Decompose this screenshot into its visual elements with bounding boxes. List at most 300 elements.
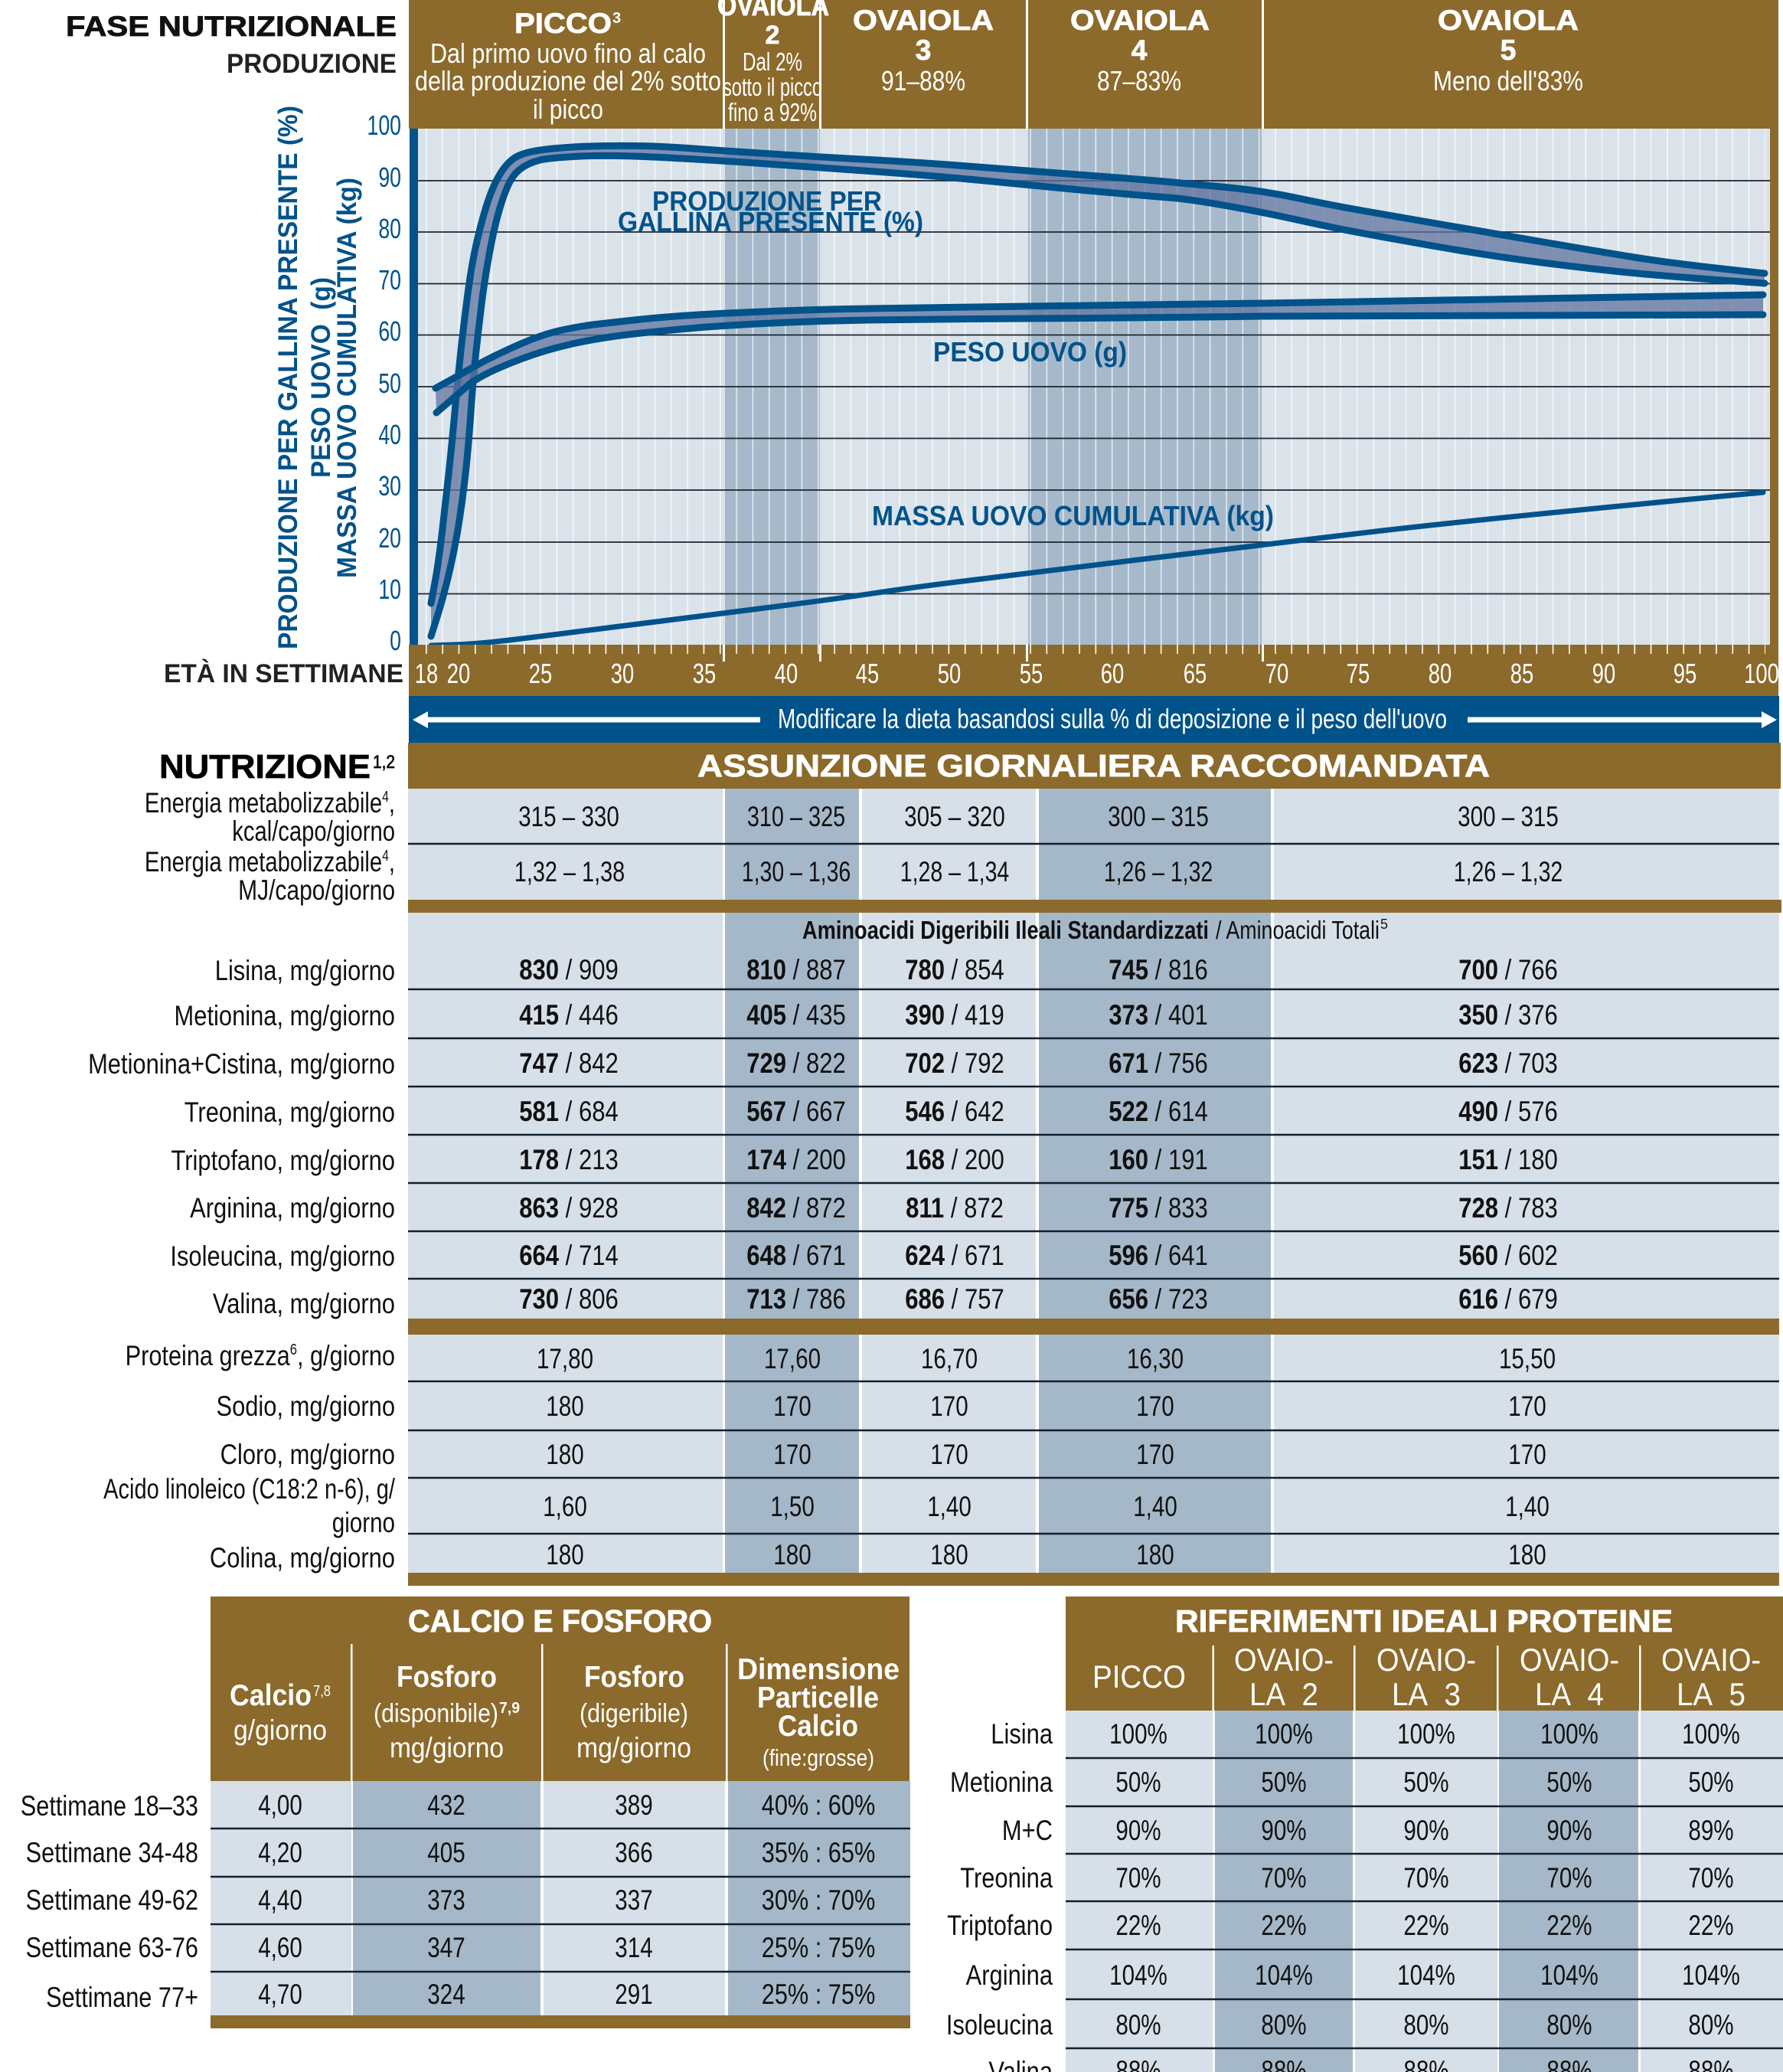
- phase: ovaiola 5: [1433, 5, 1583, 96]
- row: settimane 77+: 291: [615, 1979, 653, 2011]
- y-axis tick labels: 0: [390, 625, 401, 656]
- row: treonina: 70%: [1546, 1863, 1592, 1894]
- row: lisina: 100%: [1397, 1719, 1455, 1750]
- row: isoleucina: Isoleucina, mg/giorno: [170, 1240, 395, 1273]
- y-axis tick labels: 70: [378, 264, 401, 296]
- heading: nutrizione: NUTRIZIONE: [159, 748, 371, 786]
- panel: phase header band: [409, 0, 1778, 129]
- row: acido linoleico: [103, 1474, 1550, 1539]
- row: proteina grezza: [126, 1340, 1556, 1375]
- curve: peso uovo: [436, 295, 1763, 413]
- row: sodio: 180: [546, 1391, 584, 1423]
- row: treonina: 70%: [1261, 1863, 1307, 1894]
- row: settimane 49-62: [26, 1884, 875, 1917]
- row: metionina: 50%: [1688, 1767, 1734, 1799]
- arrow: right: [1468, 711, 1777, 728]
- column header: picco: PICCO: [1092, 1659, 1186, 1695]
- row: sodio: [216, 1391, 1546, 1423]
- row: energia MJ: 1,26 – 1,32: [1454, 855, 1563, 887]
- row: triptofano: 22%: [1688, 1910, 1734, 1942]
- row: energia MJ: 1,28 – 1,34: [900, 855, 1009, 887]
- row: proteina grezza: Proteina grezza: [126, 1340, 290, 1372]
- row: settimane 49-62: 337: [615, 1885, 653, 1917]
- row: settimane 18-33: 4,00: [258, 1790, 302, 1822]
- x-axis band with week ticks: 100: [1744, 658, 1779, 689]
- heading: riferimenti ideali proteine: RIFERIMENTI IDEALI PROTEINE: [1175, 1603, 1673, 1639]
- x-axis band with week ticks: 85: [1510, 658, 1533, 689]
- row: settimane 77+: 25% : 75%: [762, 1979, 875, 2011]
- phase: picco: della produzione del 2% sotto: [415, 65, 721, 96]
- row: colina: 180: [773, 1540, 811, 1571]
- phase: ovaiola 2: [717, 0, 829, 126]
- row: sodio: 170: [930, 1391, 968, 1423]
- row: metionina+cistina: 702 / 792: [905, 1048, 1004, 1080]
- y-axis tick labels: 60: [378, 315, 401, 347]
- row: energia MJ: 4: [382, 847, 389, 864]
- row: settimane 18-33: 432: [427, 1790, 465, 1822]
- row: triptofano: 22%: [1261, 1910, 1307, 1942]
- row: metionina: 373 / 401: [1109, 1000, 1208, 1031]
- chart: production curves: [410, 129, 1778, 696]
- row: cloro: 170: [1136, 1440, 1174, 1471]
- column header: calcio: [230, 1679, 331, 1746]
- phase: ovaiola 3: 91–88%: [881, 65, 965, 96]
- row: cloro: 170: [930, 1440, 968, 1471]
- y-axis tick labels: 40: [378, 419, 401, 450]
- column header: fosforo digeribile: mg/giorno: [576, 1732, 691, 1763]
- column header: fosforo disponibile: (disponibile): [374, 1699, 498, 1728]
- x-axis band with week ticks: 95: [1674, 658, 1696, 689]
- banner: modify diet arrow band: Modificare la dieta basandosi sulla % di deposizione e il peso dell'uovo: [778, 703, 1447, 734]
- column header: ovaiola 2: [1234, 1642, 1334, 1712]
- row: triptofano: 168 / 200: [905, 1145, 1004, 1176]
- row: treonina: 70%: [1688, 1863, 1734, 1894]
- column header: calcio: Calcio: [230, 1679, 312, 1712]
- sub-heading: aminoacidi: Aminoacidi Digeribili Ileali Standardizzati: [802, 916, 1209, 944]
- phase: ovaiola 5: 5: [1501, 34, 1516, 66]
- column header: fosforo disponibile: [374, 1661, 520, 1763]
- row: settimane 18-33: 389: [615, 1790, 653, 1822]
- row: sodio: 170: [773, 1391, 811, 1423]
- row: arginina: 104%: [1682, 1960, 1740, 1992]
- row: metionina: 50%: [1261, 1767, 1307, 1799]
- row: metionina: 405 / 435: [746, 1000, 846, 1031]
- row: treonina: Treonina, mg/giorno: [185, 1096, 395, 1129]
- y-axis title: massa uovo cumulativa: MASSA UOVO CUMULATIVA (kg): [332, 178, 362, 578]
- row: proteina grezza: 15,50: [1499, 1344, 1556, 1375]
- row: settimane 49-62: Settimane 49-62: [26, 1884, 198, 1917]
- row: arginina: Arginina: [966, 1959, 1053, 1992]
- row: settimane 77+: 4,70: [258, 1979, 302, 2011]
- row: settimane 18-33: [21, 1789, 875, 1822]
- curve label: peso uovo: PESO UOVO (g): [933, 336, 1127, 368]
- row: arginina: Arginina, mg/giorno: [190, 1192, 395, 1224]
- x-axis band with week ticks: 45: [856, 658, 879, 689]
- row: energia kcal: 305 – 320: [904, 802, 1005, 833]
- column header: ovaiola 5: OVAIO-: [1661, 1642, 1761, 1678]
- row: treonina: 522 / 614: [1109, 1096, 1208, 1128]
- row: arginina: 811 / 872: [906, 1193, 1004, 1224]
- row: valina: [988, 2056, 1734, 2072]
- column header: fosforo digeribile: [576, 1661, 691, 1763]
- row: arginina: 104%: [1109, 1960, 1167, 1992]
- row: colina: 180: [546, 1540, 584, 1571]
- row: proteina grezza: 16,30: [1127, 1344, 1184, 1375]
- row: triptofano: [171, 1145, 1558, 1177]
- row: M+C: 90%: [1403, 1815, 1449, 1847]
- row: settimane 18-33: Settimane 18–33: [21, 1790, 198, 1822]
- row: isoleucina: [170, 1240, 1558, 1273]
- row: triptofano: 160 / 191: [1109, 1145, 1208, 1176]
- row: isoleucina: 648 / 671: [746, 1240, 846, 1272]
- row: M+C: 89%: [1688, 1815, 1734, 1847]
- row: metionina: 50%: [1403, 1767, 1449, 1799]
- row: lisina: 100%: [1255, 1719, 1313, 1750]
- row: M+C: M+C: [1002, 1815, 1053, 1847]
- row: triptofano: 174 / 200: [746, 1145, 846, 1176]
- row: triptofano: 22%: [1546, 1910, 1592, 1942]
- row: arginina: 728 / 783: [1458, 1193, 1558, 1224]
- row: energia MJ: 1,30 – 1,36: [742, 855, 851, 887]
- column header: ovaiola 4: LA 4: [1535, 1676, 1604, 1712]
- row: energia MJ: Energia metabolizzabile: [145, 847, 382, 878]
- heading: nutrizione: 1,2: [373, 752, 395, 773]
- row: acido linoleico: giorno: [332, 1508, 395, 1539]
- row: proteina grezza: 17,80: [537, 1344, 593, 1375]
- row: arginina: 863 / 928: [519, 1193, 619, 1224]
- curve: produzione per gallina presente: [431, 145, 1765, 636]
- row: settimane 63-76: 347: [427, 1933, 465, 1964]
- row: cloro: 180: [546, 1440, 584, 1471]
- curve label: produzione: GALLINA PRESENTE (%): [618, 206, 923, 237]
- row: treonina: 567 / 667: [746, 1096, 846, 1128]
- x-axis band with week ticks: 90: [1592, 658, 1615, 689]
- heading: fase nutrizionale: FASE NUTRIZIONALE: [66, 11, 397, 42]
- row: settimane 77+: Settimane 77+: [46, 1982, 198, 2014]
- row: valina: 686 / 757: [905, 1284, 1004, 1315]
- row: lisina: 100%: [1109, 1719, 1167, 1750]
- sub-heading: aminoacidi: / Aminoacidi Totali: [1216, 916, 1380, 944]
- row: energia kcal: Energia metabolizzabile: [145, 788, 382, 819]
- row: arginina: 104%: [1397, 1960, 1455, 1992]
- row: valina: 616 / 679: [1458, 1284, 1558, 1315]
- row: settimane 34-48: [26, 1837, 875, 1869]
- row: settimane 49-62: 373: [427, 1885, 465, 1917]
- panel: nutrition table: [88, 743, 1781, 1586]
- row: lisina: 780 / 854: [905, 955, 1004, 986]
- row: metionina: Metionina: [950, 1766, 1053, 1799]
- row: isoleucina: 596 / 641: [1109, 1240, 1208, 1272]
- row: settimane 77+: [46, 1979, 875, 2014]
- curve label: massa uovo: MASSA UOVO CUMULATIVA (kg): [872, 500, 1274, 531]
- table column backgrounds: [408, 789, 1781, 1586]
- row: lisina: [215, 955, 1558, 987]
- y-axis title: peso uovo: PESO UOVO (g): [306, 277, 336, 478]
- row: settimane 49-62: 4,40: [258, 1885, 302, 1917]
- row: lisina: [991, 1718, 1740, 1750]
- column header: calcio: g/giorno: [233, 1714, 327, 1746]
- phase: ovaiola 4: 4: [1132, 34, 1148, 66]
- row: lisina: 100%: [1540, 1719, 1598, 1750]
- row: valina: 730 / 806: [519, 1284, 619, 1315]
- row: colina: 180: [930, 1540, 968, 1571]
- x-axis band with week ticks: 30: [611, 658, 634, 689]
- x-axis band with week ticks: 40: [775, 658, 798, 689]
- y-axis tick labels: 20: [378, 522, 401, 554]
- row: proteina grezza: 6: [290, 1341, 297, 1358]
- y-axis title: produzione per gallina presente: PRODUZIONE PER GALLINA PRESENTE (%): [273, 106, 303, 649]
- row: triptofano: 178 / 213: [519, 1145, 619, 1176]
- phase: ovaiola 5: OVAIOLA: [1438, 5, 1579, 36]
- heading: calcio e fosforo: CALCIO E FOSFORO: [408, 1603, 712, 1639]
- row: metionina: 350 / 376: [1458, 1000, 1558, 1031]
- phase: ovaiola 5: Meno dell'83%: [1433, 65, 1583, 96]
- x-axis band with week ticks: [409, 645, 1779, 696]
- x-axis band with week ticks: 55: [1020, 658, 1043, 689]
- row: colina: Colina, mg/giorno: [210, 1542, 395, 1574]
- y-axis tick labels: 50: [378, 368, 401, 399]
- phase: picco: [415, 8, 721, 125]
- row: metionina: Metionina, mg/giorno: [175, 1000, 395, 1032]
- row: energia MJ: MJ/capo/giorno: [238, 875, 395, 907]
- row: isoleucina: 80%: [1115, 2010, 1161, 2041]
- row: triptofano: 151 / 180: [1458, 1145, 1558, 1176]
- column header: ovaiola 4: [1520, 1642, 1619, 1712]
- row: metionina+cistina: 671 / 756: [1109, 1048, 1208, 1080]
- column header: ovaiola 2: OVAIO-: [1234, 1642, 1334, 1678]
- y-axis tick labels: 30: [378, 470, 401, 502]
- phase: ovaiola 2: Dal 2%: [743, 47, 802, 76]
- row: treonina: 70%: [1403, 1863, 1449, 1894]
- phase: ovaiola 4: 87–83%: [1097, 65, 1181, 96]
- x-axis band with week ticks: 50: [938, 658, 961, 689]
- row: M+C: 90%: [1546, 1815, 1592, 1847]
- phase: ovaiola 2: 2: [766, 21, 779, 50]
- row: acido linoleico: Acido linoleico (C18:2 n-6), g/: [103, 1474, 396, 1505]
- row: triptofano: Triptofano, mg/giorno: [171, 1145, 395, 1177]
- row: metionina+cistina: [88, 1048, 1558, 1080]
- row: lisina: 745 / 816: [1109, 955, 1208, 986]
- column header: fosforo digeribile: Fosforo: [584, 1661, 684, 1694]
- y-axis tick labels: [367, 109, 401, 656]
- y-axis tick labels: 10: [378, 574, 401, 605]
- x-axis band with week ticks: 75: [1347, 658, 1370, 689]
- phase: ovaiola 2: fino a 92%: [728, 98, 817, 126]
- row: settimane 63-76: [26, 1932, 875, 1964]
- y-axis tick labels: 80: [378, 213, 401, 244]
- row: metionina+cistina: Metionina+Cistina, mg/giorno: [88, 1048, 395, 1080]
- row: arginina: [190, 1192, 1558, 1224]
- row: colina: 180: [1508, 1540, 1546, 1571]
- row: settimane 34-48: 366: [615, 1838, 653, 1869]
- row: settimane 77+: 324: [427, 1979, 465, 2011]
- row: lisina: Lisina: [991, 1718, 1053, 1750]
- row: sodio: 170: [1136, 1391, 1174, 1423]
- banner: modify diet arrow band: [409, 696, 1779, 743]
- row: treonina: [960, 1862, 1734, 1894]
- row: colina: 180: [1136, 1540, 1174, 1571]
- row: M+C: 90%: [1115, 1815, 1161, 1847]
- row: metionina: [175, 1000, 1558, 1032]
- row: isoleucina: 664 / 714: [519, 1240, 619, 1272]
- row: metionina+cistina: 729 / 822: [746, 1048, 846, 1080]
- row: lisina: 700 / 766: [1458, 955, 1558, 986]
- column header: ovaiola 3: OVAIO-: [1376, 1642, 1476, 1678]
- row: acido linoleico: 1,40: [1133, 1492, 1177, 1523]
- row: acido linoleico: 1,40: [927, 1492, 972, 1523]
- row: cloro: 170: [1508, 1440, 1546, 1471]
- curve label: produzione: PRODUZIONE PER: [652, 185, 882, 217]
- row: proteina grezza: , g/giorno: [297, 1340, 395, 1372]
- row: lisina: 810 / 887: [746, 955, 846, 986]
- x-axis band with week ticks: 60: [1101, 658, 1124, 689]
- row: colina: [210, 1540, 1546, 1574]
- x-axis band with week ticks: 18: [415, 658, 438, 689]
- row: metionina: [950, 1766, 1734, 1799]
- column header: fosforo disponibile: Fosforo: [397, 1661, 497, 1694]
- row: acido linoleico: 1,50: [770, 1492, 815, 1523]
- row: metionina: 415 / 446: [519, 1000, 619, 1031]
- panel: riferimenti ideali proteine: [946, 1596, 1783, 2072]
- column header: dimensione particelle: [737, 1653, 900, 1771]
- phase: ovaiola 3: [853, 5, 994, 96]
- phase: ovaiola 3: 3: [916, 34, 931, 66]
- row: lisina: 830 / 909: [519, 955, 619, 986]
- row: isoleucina: 80%: [1546, 2010, 1592, 2041]
- x-axis band with week ticks: 25: [529, 658, 552, 689]
- phase: ovaiola 4: OVAIOLA: [1070, 5, 1210, 36]
- row: energia kcal: kcal/capo/giorno: [232, 816, 395, 848]
- row: triptofano: Triptofano: [947, 1910, 1053, 1942]
- phase: picco: Dal primo uovo fino al calo: [430, 38, 706, 69]
- row: isoleucina: Isoleucina: [946, 2009, 1053, 2041]
- row: lisina: 100%: [1682, 1719, 1740, 1750]
- column header: ovaiola 3: [1376, 1642, 1476, 1712]
- row: cloro: [220, 1439, 1546, 1471]
- row: metionina: 390 / 419: [905, 1000, 1004, 1031]
- row: proteina grezza: 16,70: [921, 1344, 978, 1375]
- row: valina: Valina, mg/giorno: [213, 1288, 395, 1320]
- row: proteina grezza: 17,60: [764, 1344, 821, 1375]
- row: settimane 49-62: 30% : 70%: [762, 1884, 875, 1917]
- row: settimane 63-76: 314: [615, 1933, 653, 1964]
- row: settimane 34-48: 35% : 65%: [762, 1837, 875, 1869]
- row: metionina+cistina: 623 / 703: [1458, 1048, 1558, 1080]
- column header: dimensione particelle: Calcio: [778, 1710, 858, 1743]
- column header: calcio: 7,8: [313, 1683, 331, 1700]
- phase: picco: 3: [612, 10, 621, 27]
- row: arginina: 842 / 872: [746, 1193, 846, 1224]
- y-axis tick labels: 100: [367, 109, 401, 141]
- row: cloro: 170: [773, 1440, 811, 1471]
- column header: fosforo disponibile: mg/giorno: [390, 1732, 504, 1763]
- row: treonina: 490 / 576: [1458, 1096, 1558, 1128]
- row: energia MJ: 1,26 – 1,32: [1104, 855, 1213, 887]
- column header: dimensione particelle: Dimensione: [737, 1653, 900, 1686]
- heading: produzione: PRODUZIONE: [227, 49, 397, 79]
- row: energia kcal: 300 – 315: [1108, 802, 1209, 833]
- row: isoleucina: 80%: [1261, 2010, 1307, 2041]
- row: settimane 34-48: 4,20: [258, 1838, 302, 1869]
- y-axis tick labels: 90: [378, 162, 401, 193]
- row: energia MJ: [145, 847, 1563, 907]
- row: energia kcal: [145, 788, 1559, 848]
- phase: ovaiola 3: OVAIOLA: [853, 5, 994, 36]
- row: acido linoleico: 1,60: [543, 1492, 587, 1523]
- x-axis band with week ticks: 65: [1184, 658, 1207, 689]
- row: valina: 713 / 786: [746, 1284, 846, 1315]
- row: settimane 63-76: 4,60: [258, 1933, 302, 1964]
- row: isoleucina: 80%: [1403, 2010, 1449, 2041]
- x-axis band with week ticks: 70: [1265, 658, 1288, 689]
- row: lisina: Lisina, mg/giorno: [215, 955, 395, 987]
- column header: fosforo disponibile: 7,9: [499, 1700, 520, 1717]
- row: energia kcal: 300 – 315: [1458, 802, 1559, 833]
- curve: massa uovo cumulativa: [431, 492, 1763, 645]
- row: isoleucina: [946, 2009, 1734, 2041]
- curve label: produzione: [618, 185, 923, 237]
- row: metionina: 50%: [1546, 1767, 1592, 1799]
- row: isoleucina: 624 / 671: [905, 1240, 1004, 1272]
- row: triptofano: 22%: [1403, 1910, 1449, 1942]
- row: arginina: [966, 1959, 1740, 1992]
- phase: picco: il picco: [533, 93, 603, 125]
- row: treonina: Treonina: [960, 1862, 1053, 1894]
- column header: ovaiola 4: OVAIO-: [1520, 1642, 1619, 1678]
- row: arginina: 775 / 833: [1109, 1193, 1208, 1224]
- row: isoleucina: 80%: [1688, 2010, 1734, 2041]
- sub-heading: aminoacidi: 5: [1380, 917, 1388, 932]
- row: energia kcal: ,: [389, 788, 395, 819]
- row: energia kcal: 310 – 325: [747, 802, 845, 833]
- row: sodio: 170: [1508, 1391, 1546, 1423]
- x-axis band with week ticks: 80: [1429, 658, 1452, 689]
- row: treonina: 70%: [1115, 1863, 1161, 1894]
- row: acido linoleico: 1,40: [1505, 1492, 1550, 1523]
- row: energia kcal: 4: [382, 788, 389, 805]
- arrow: left: [413, 711, 760, 728]
- heading: assunzione giornaliera raccomandata: ASSUNZIONE GIORNALIERA RACCOMANDATA: [697, 748, 1490, 783]
- row: arginina: 104%: [1540, 1960, 1598, 1992]
- row: energia MJ: ,: [389, 847, 395, 878]
- row: settimane 63-76: 25% : 75%: [762, 1932, 875, 1964]
- x-axis band with week ticks: 20: [447, 658, 470, 689]
- row: settimane 18-33: 40% : 60%: [762, 1789, 875, 1822]
- row: treonina: 581 / 684: [519, 1096, 619, 1128]
- row: sodio: Sodio, mg/giorno: [216, 1391, 395, 1423]
- row: triptofano: [947, 1910, 1734, 1942]
- row: metionina+cistina: 747 / 842: [519, 1048, 619, 1080]
- row: triptofano: 22%: [1115, 1910, 1161, 1942]
- row: valina: [213, 1284, 1558, 1320]
- row: energia kcal: 315 – 330: [518, 802, 619, 833]
- column header: ovaiola 5: [1661, 1642, 1761, 1712]
- row: M+C: 90%: [1261, 1815, 1307, 1847]
- row: cloro: Cloro, mg/giorno: [220, 1439, 395, 1471]
- row: energia MJ: 1,32 – 1,38: [514, 857, 625, 888]
- row: M+C: [1002, 1815, 1734, 1847]
- row: treonina: 546 / 642: [905, 1096, 1004, 1128]
- row: settimane 34-48: 405: [427, 1838, 465, 1869]
- row: settimane 63-76: Settimane 63-76: [26, 1932, 198, 1964]
- x-axis band with week ticks: 35: [693, 658, 716, 689]
- row: isoleucina: 560 / 602: [1458, 1240, 1558, 1272]
- phase: ovaiola 4: [1070, 5, 1210, 96]
- column header: ovaiola 2: LA 2: [1249, 1676, 1318, 1712]
- phase: ovaiola 2: sotto il picco: [723, 73, 822, 101]
- row: metionina: 50%: [1115, 1767, 1161, 1799]
- row: arginina: 104%: [1255, 1960, 1313, 1992]
